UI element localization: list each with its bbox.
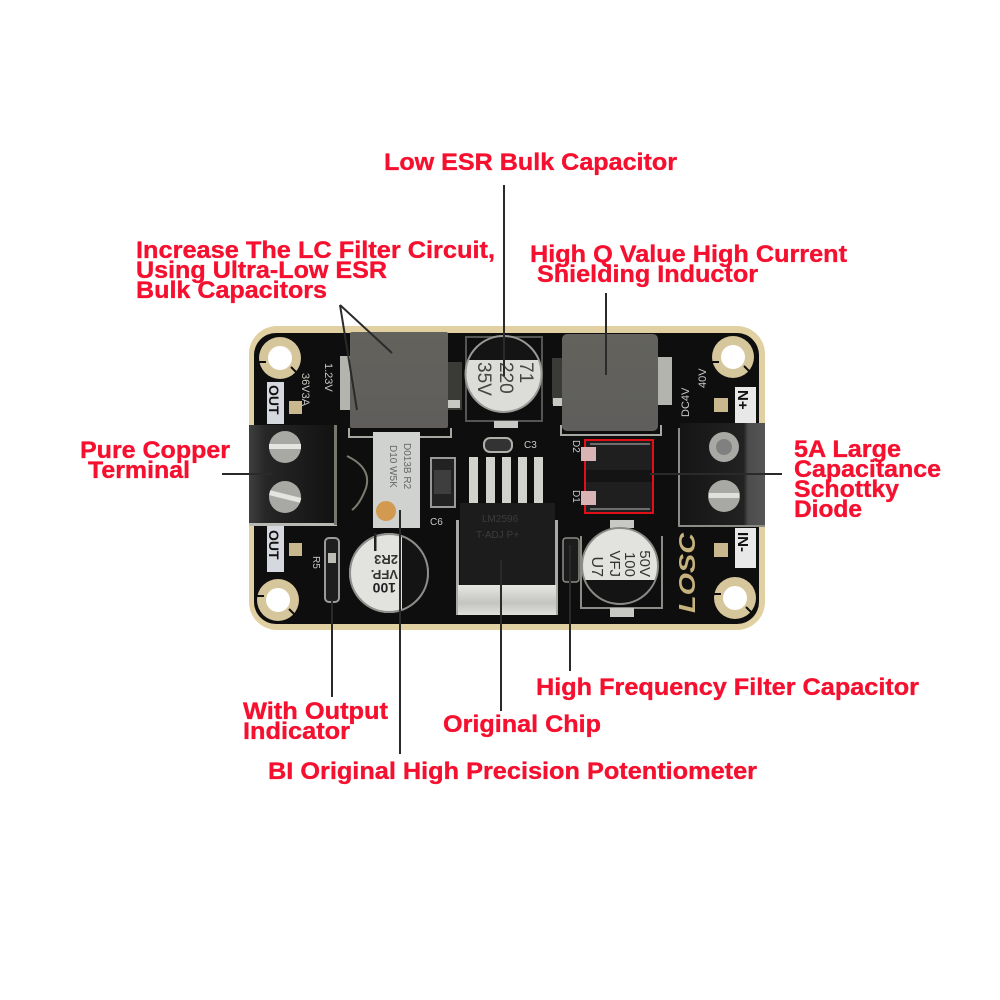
output indicator LED	[325, 538, 339, 602]
output capacitor	[349, 533, 429, 613]
label: original chip: Original Chip	[443, 711, 601, 738]
label: schottky diode	[794, 436, 941, 523]
silkscreen labels: DC4V	[680, 387, 692, 417]
silkscreen labels: OUT	[266, 530, 282, 560]
label: with output indicator	[243, 698, 388, 745]
label: low ESR bulk capacitor: Low ESR Bulk Capacitor	[384, 149, 677, 176]
potentiometer: D013B R2	[401, 443, 412, 490]
right shielding inductor	[552, 334, 672, 435]
silkscreen labels: C6	[430, 517, 443, 528]
filter capacitor: 100	[621, 552, 638, 577]
regulator chip	[456, 438, 558, 615]
arrow: low ESR capacitor	[503, 185, 505, 376]
label: schottky diode: Schottky	[794, 476, 900, 503]
silkscreen labels: 36V3A	[299, 373, 311, 407]
silkscreen labels: N+	[734, 390, 751, 410]
label: shielding inductor	[530, 241, 847, 288]
label: LC filter circuit: Increase The LC Filter Circuit,	[136, 237, 495, 264]
label: shielding inductor: Shielding Inductor	[537, 261, 758, 288]
silkscreen labels: D1	[570, 490, 581, 503]
arrow: schottky diode	[650, 473, 782, 475]
output capacitor: VFP.	[371, 567, 398, 582]
arrow: shielding inductor	[605, 293, 607, 375]
label: LC filter circuit: Using Ultra-Low ESR	[136, 257, 387, 284]
left shielding inductor	[340, 332, 462, 437]
mounting holes	[257, 336, 756, 621]
bulk capacitor	[466, 336, 542, 428]
left terminal block	[249, 425, 337, 526]
bulk capacitor: 71	[515, 362, 536, 383]
high frequency capacitor	[563, 538, 579, 582]
filter capacitor: VFJ	[606, 550, 623, 577]
potentiometer	[373, 432, 455, 528]
label: pure copper terminal	[80, 437, 230, 484]
output capacitor: 2R3	[374, 552, 398, 567]
label: high frequency filter capacitor: High Frequency Filter Capacitor	[536, 674, 919, 701]
arrow: potentiometer	[399, 510, 401, 754]
silkscreen labels: C3	[524, 440, 537, 451]
silkscreen labels: OUT	[266, 385, 282, 415]
label: potentiometer: BI Original High Precision Potentiometer	[268, 758, 757, 785]
potentiometer: D10 W5K	[387, 445, 398, 488]
bulk capacitor: 220	[495, 362, 516, 394]
silkscreen labels: 40V	[697, 368, 709, 388]
label: shielding inductor: High Q Value High Current	[530, 241, 847, 268]
arrow: output indicator	[331, 600, 333, 697]
leader lines	[222, 185, 782, 754]
board surface	[254, 333, 759, 624]
label: schottky diode: Diode	[794, 496, 862, 523]
filter capacitor	[581, 520, 662, 617]
label: pure copper terminal: Pure Copper	[80, 437, 230, 464]
board outline	[249, 326, 765, 630]
silkscreen labels: IN-	[734, 532, 751, 552]
arrow: LC filter right	[340, 305, 392, 353]
right terminal block	[679, 423, 765, 526]
arrow: LC filter left	[340, 305, 357, 410]
label: pure copper terminal: Terminal	[88, 457, 190, 484]
schottky diodes	[581, 440, 653, 513]
circuit board	[249, 326, 765, 630]
output capacitor: 100	[372, 580, 396, 596]
regulator chip: LM2596	[482, 514, 519, 525]
silkscreen labels: LOSC	[674, 533, 700, 613]
filter capacitor: 50V	[636, 550, 653, 577]
silkscreen labels: D2	[570, 440, 581, 453]
silkscreen labels: 1.23V	[322, 363, 334, 392]
arrow: high frequency capacitor	[569, 545, 571, 671]
label: schottky diode: 5A Large	[794, 436, 901, 463]
labels	[80, 149, 941, 785]
label: LC filter circuit: Bulk Capacitors	[136, 277, 327, 304]
label: LC filter circuit	[136, 237, 495, 304]
regulator chip: T-ADJ P+	[476, 530, 519, 541]
filter capacitor: U7	[588, 557, 605, 577]
arrow: copper terminal	[222, 473, 272, 475]
label: with output indicator: With Output	[243, 698, 388, 725]
label: schottky diode: Capacitance	[794, 456, 941, 483]
silkscreen labels	[266, 363, 756, 613]
arrow: original chip	[500, 560, 502, 711]
label: with output indicator: Indicator	[243, 718, 350, 745]
bulk capacitor: 35V	[473, 362, 494, 396]
silkscreen labels: R5	[310, 556, 321, 569]
